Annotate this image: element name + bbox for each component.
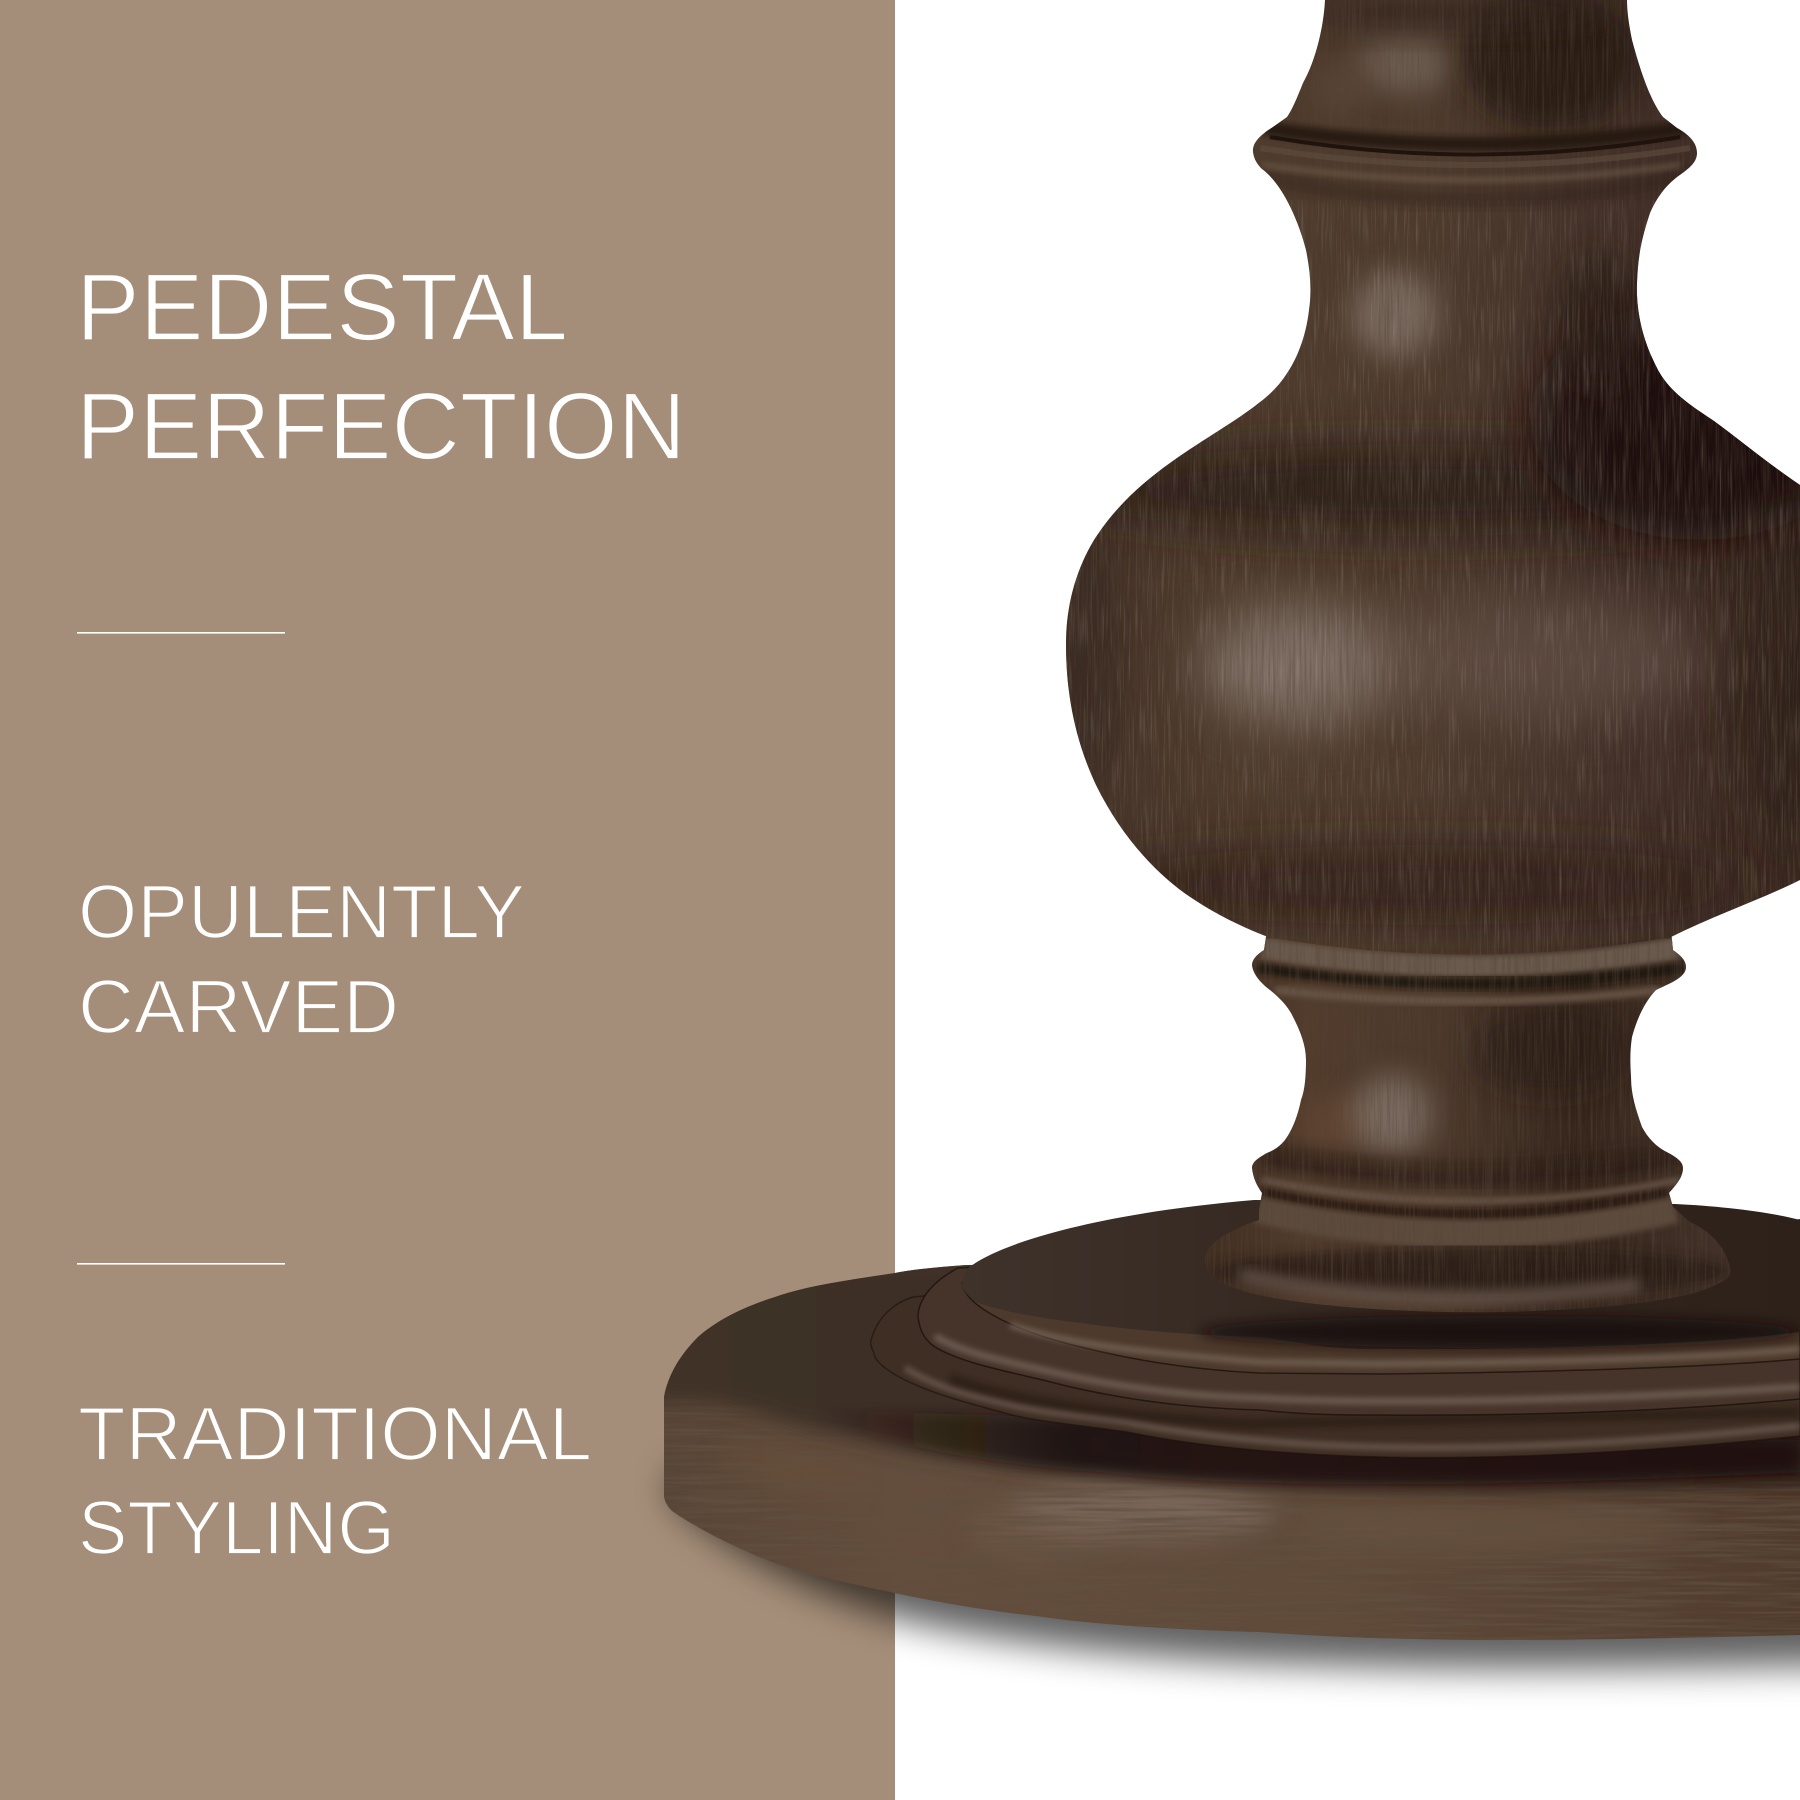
lamp: pedestal illustration	[600, 0, 1800, 1660]
tier 2	[918, 1220, 1800, 1415]
text: Opulently Carved: OPULENTLY	[78, 870, 525, 955]
divider 2	[77, 1263, 285, 1265]
heading: Pedestal Perfection	[76, 254, 686, 480]
floor shadow under lamp base	[672, 1470, 1800, 1669]
tier 3	[871, 1220, 1800, 1458]
plate top	[962, 1200, 1800, 1349]
text: Traditional Styling: TRADITIONAL	[78, 1392, 592, 1477]
heading: Pedestal Perfection: PERFECTION	[76, 373, 686, 480]
heading: Pedestal Perfection: PEDESTAL	[76, 254, 568, 361]
text: Opulently Carved	[78, 870, 525, 1050]
text: Traditional Styling: STYLING	[78, 1486, 395, 1571]
lamp base stepped tiers	[871, 1200, 1800, 1458]
lamp lower turned stem	[1200, 930, 1740, 1320]
lamp bulb body and neck	[1050, 0, 1800, 980]
panel: tan left column	[0, 0, 895, 1800]
text: Traditional Styling	[78, 1392, 592, 1571]
lamp base drum	[664, 1264, 1800, 1640]
text: Opulently Carved: CARVED	[78, 965, 399, 1050]
tier 1 side	[962, 1220, 1800, 1374]
divider 1	[77, 632, 285, 634]
